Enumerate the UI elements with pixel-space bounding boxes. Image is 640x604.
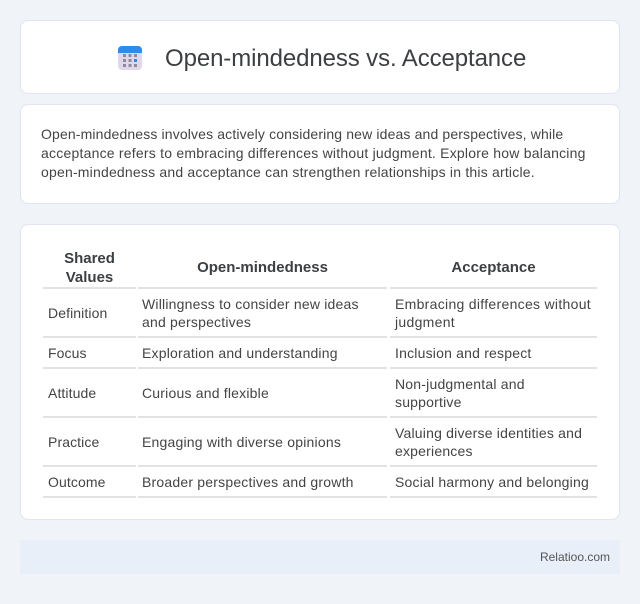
- table header: Open-mindedness: [197, 259, 328, 276]
- row: attitude: Curious and flexible: [142, 385, 269, 401]
- row: outcome: Social harmony and belonging: [395, 474, 589, 490]
- row: attitude: supportive: [395, 394, 462, 410]
- row: definition: Embracing differences without: [395, 296, 591, 312]
- row: outcome: Broader perspectives and growth: [142, 474, 354, 490]
- row: definition: judgment: [395, 314, 455, 330]
- row: definition: Willingness to consider new ideas: [142, 296, 359, 312]
- text: introduction: acceptance refers to embracing differences without judgment. Explore how balancing: [41, 145, 586, 161]
- row: definition: [48, 296, 591, 330]
- footer text: Relatioo.com: [540, 550, 610, 564]
- row: focus: Exploration and understanding: [142, 345, 338, 361]
- row: practice: Practice: [48, 434, 99, 450]
- row: definition: Definition: [48, 305, 107, 321]
- panel: introduction: [20, 104, 620, 204]
- text: introduction: [41, 126, 586, 180]
- text: introduction: open-mindedness and acceptance can strengthen relationships in this article.: [41, 164, 535, 180]
- row: practice: [48, 425, 582, 459]
- row: attitude: [48, 376, 525, 410]
- row: outcome: [48, 474, 589, 490]
- row: attitude: Attitude: [48, 385, 96, 401]
- row: practice: Engaging with diverse opinions: [142, 434, 341, 450]
- row: attitude: Non-judgmental and: [395, 376, 525, 392]
- table header: Shared: [64, 250, 115, 267]
- row: outcome: Outcome: [48, 474, 106, 490]
- text: introduction: Open-mindedness involves actively considering new ideas and perspectives, while: [41, 126, 563, 142]
- row: practice: Valuing diverse identities and: [395, 425, 582, 441]
- table header: Acceptance: [451, 259, 536, 276]
- table header: [64, 250, 536, 286]
- icon: calendar: [118, 46, 142, 70]
- panel: comparison table: [20, 224, 620, 520]
- panel: title card: [20, 20, 620, 94]
- row: definition: and perspectives: [142, 314, 251, 330]
- title: Open-mindedness vs. Acceptance: [165, 45, 526, 72]
- row: focus: Inclusion and respect: [395, 345, 532, 361]
- row: practice: experiences: [395, 443, 473, 459]
- table header: Values: [66, 269, 113, 286]
- row: focus: [48, 345, 532, 361]
- footer bar: [20, 540, 620, 574]
- row: focus: Focus: [48, 345, 87, 361]
